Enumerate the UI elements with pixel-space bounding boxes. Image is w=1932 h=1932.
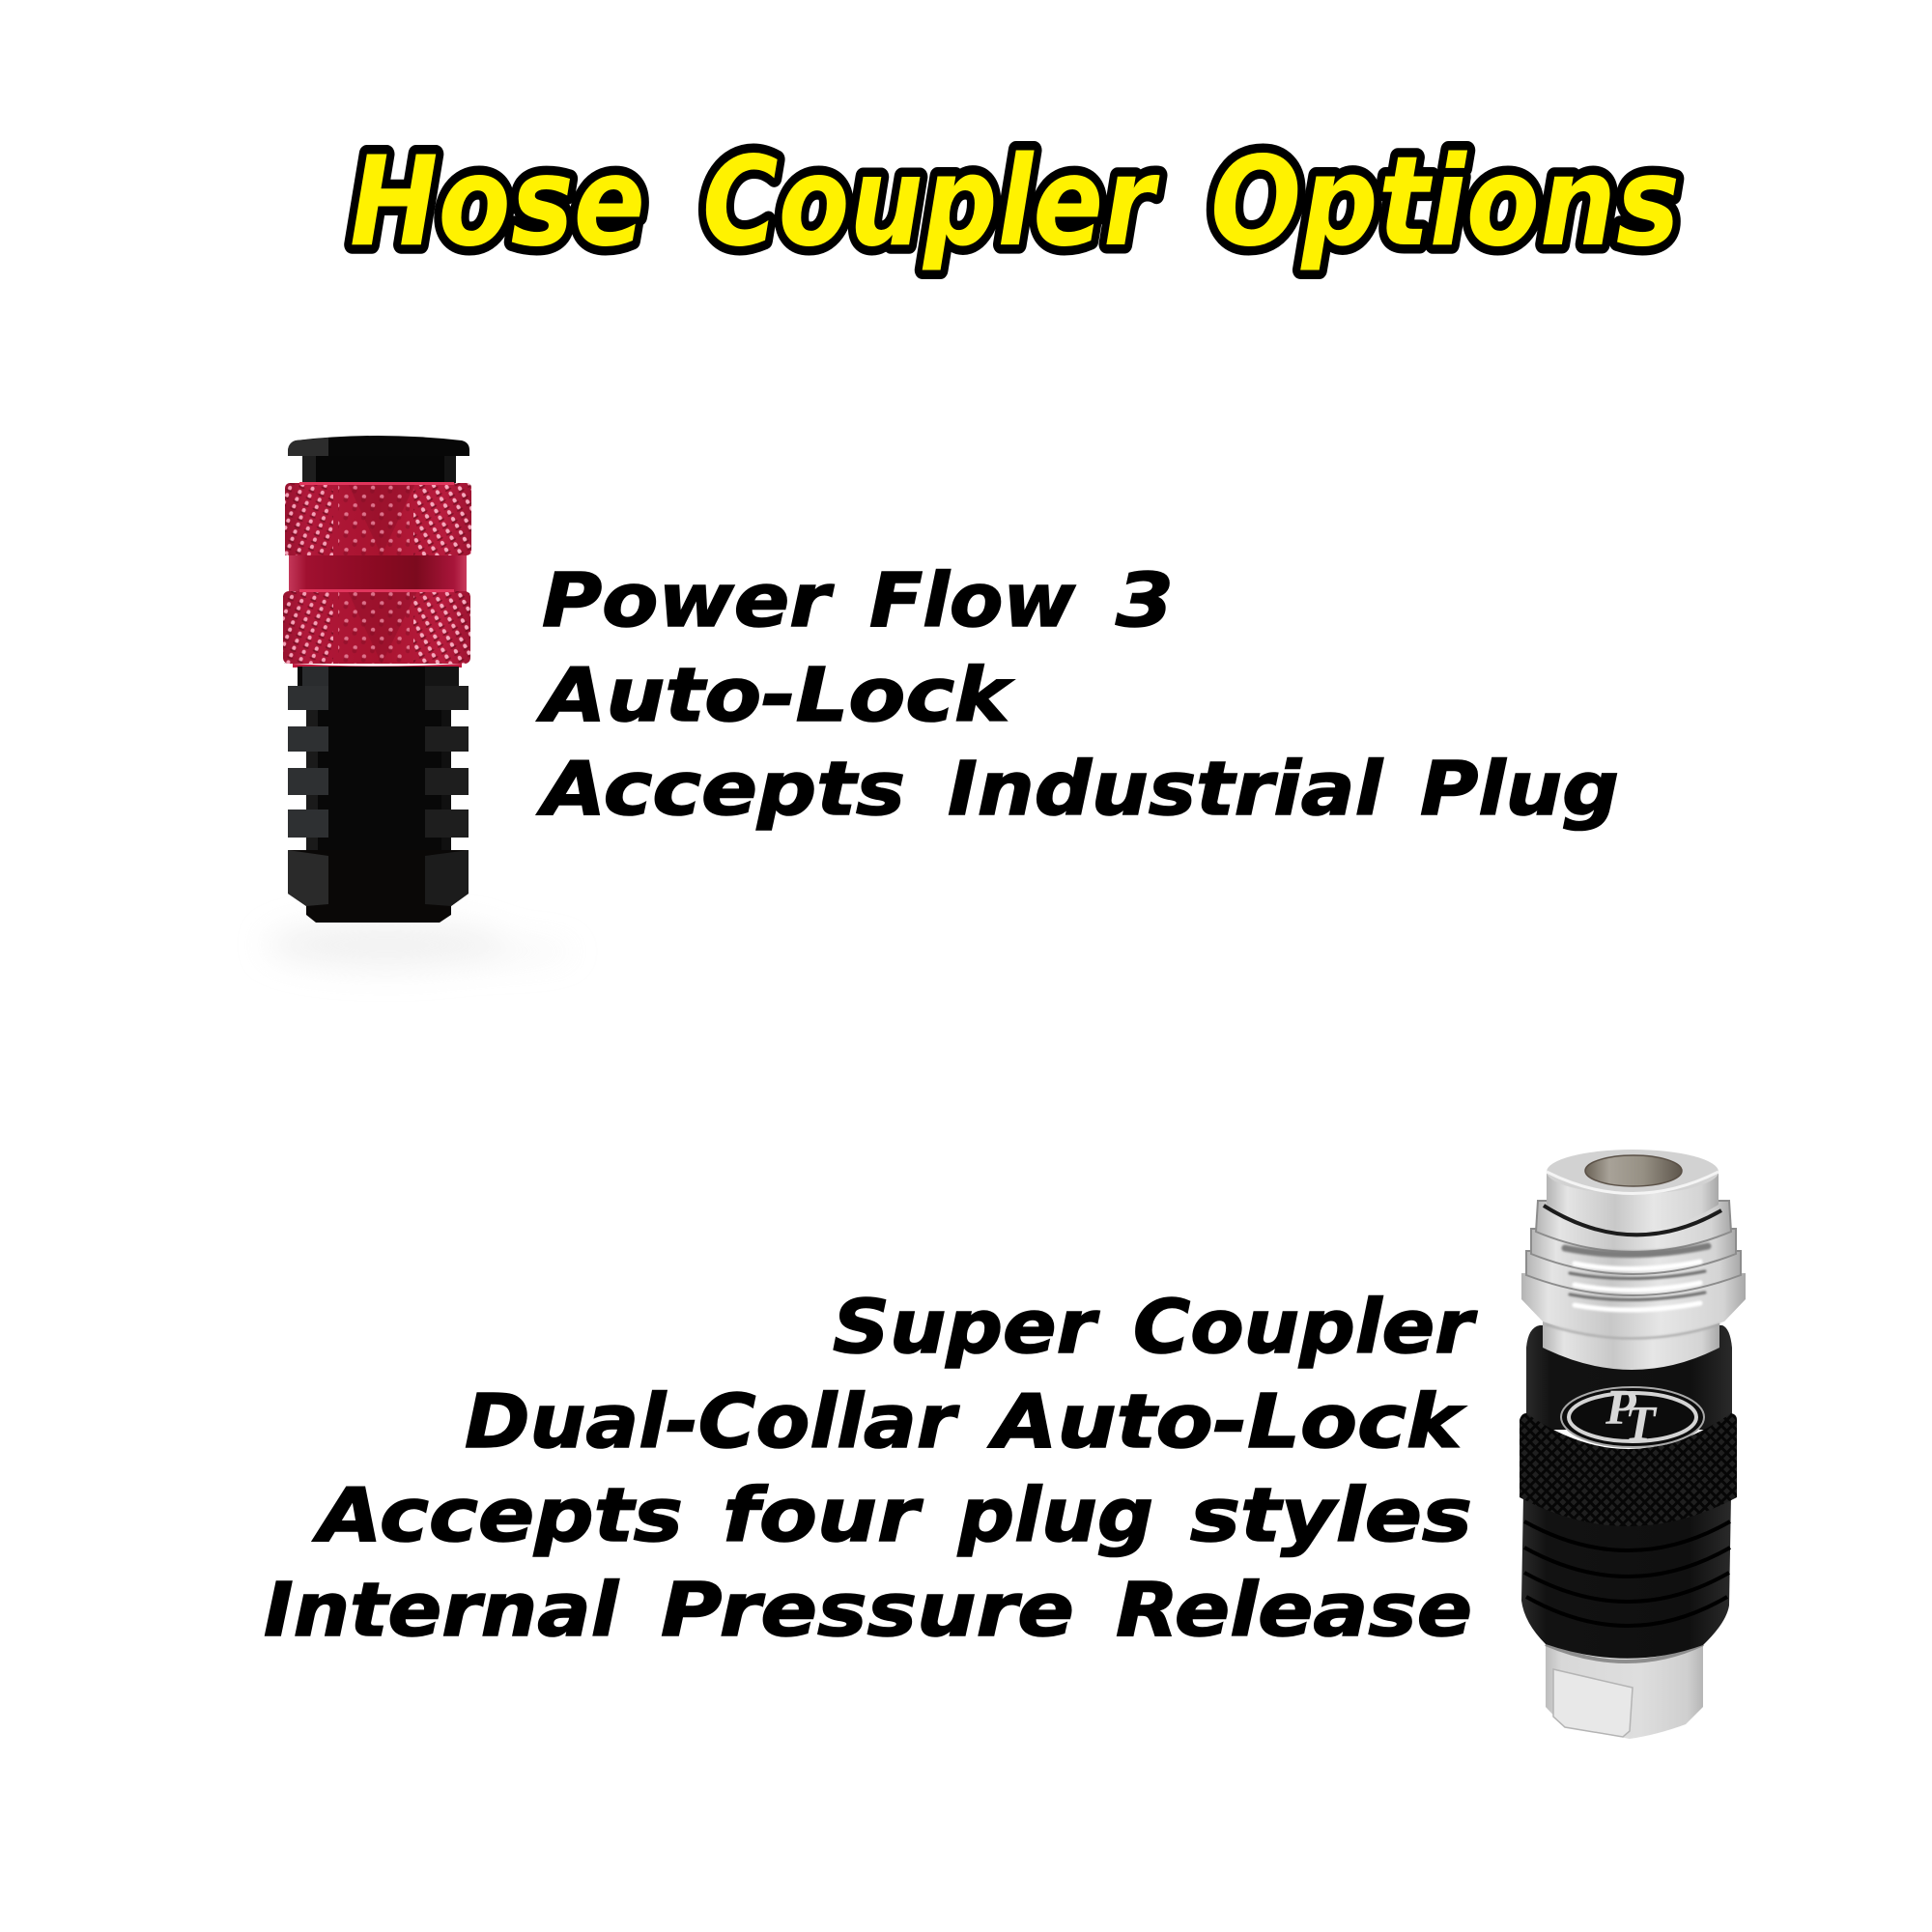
red knurled collar (283, 482, 473, 668)
text: Super Coupler features: plug (957, 1473, 1153, 1559)
text: Power Flow 3 features: Power (542, 558, 834, 644)
text: Super Coupler features: Pressure (661, 1568, 1074, 1654)
text: Power Flow 3 features: 3 (1116, 558, 1174, 644)
text: Super Coupler features: Accepts (312, 1473, 683, 1559)
silver base hex (1546, 1637, 1703, 1739)
title: Coupler (702, 130, 1160, 274)
text: Super Coupler features (264, 1285, 1477, 1654)
silver top ring with bore (1544, 1150, 1721, 1235)
PT logo: T (1625, 1397, 1658, 1452)
text: Power Flow 3 features: Accepts (536, 747, 905, 833)
title: Options (1210, 130, 1680, 274)
black finned hex body (288, 667, 469, 923)
text: Power Flow 3 features: Plug (1420, 747, 1619, 833)
text: Super Coupler features: four (723, 1473, 923, 1559)
text: Super Coupler features: Internal (264, 1568, 620, 1654)
title (350, 130, 1680, 274)
text: Power Flow 3 features: Industrial (948, 747, 1384, 833)
text: Super Coupler features: Release (1116, 1568, 1472, 1654)
text: Power Flow 3 features (536, 558, 1619, 833)
text: Super Coupler features: styles (1190, 1473, 1472, 1559)
text: Super Coupler features: Auto-Lock (987, 1379, 1466, 1465)
silver threaded collar (1521, 1201, 1746, 1339)
black ribbed section (1521, 1495, 1731, 1659)
black collar (1526, 1325, 1732, 1430)
PT logo (1561, 1380, 1704, 1452)
silver neck (1543, 1314, 1719, 1372)
PT logo: P (1605, 1380, 1637, 1435)
text: Super Coupler features: Coupler (1133, 1285, 1477, 1371)
title: Hose (350, 130, 645, 274)
text: Super Coupler features: Dual-Collar (465, 1379, 959, 1465)
text: Power Flow 3 features: Flow (869, 558, 1076, 644)
product: Super Coupler (1520, 1150, 1746, 1739)
black flange and neck (288, 436, 469, 485)
product: Power Flow 3 coupler (266, 436, 575, 968)
text: Power Flow 3 features: Auto-Lock (536, 653, 1014, 739)
black knurled grip (1520, 1413, 1737, 1526)
cast shadow (266, 922, 575, 968)
text: Super Coupler features: Super (833, 1285, 1099, 1371)
